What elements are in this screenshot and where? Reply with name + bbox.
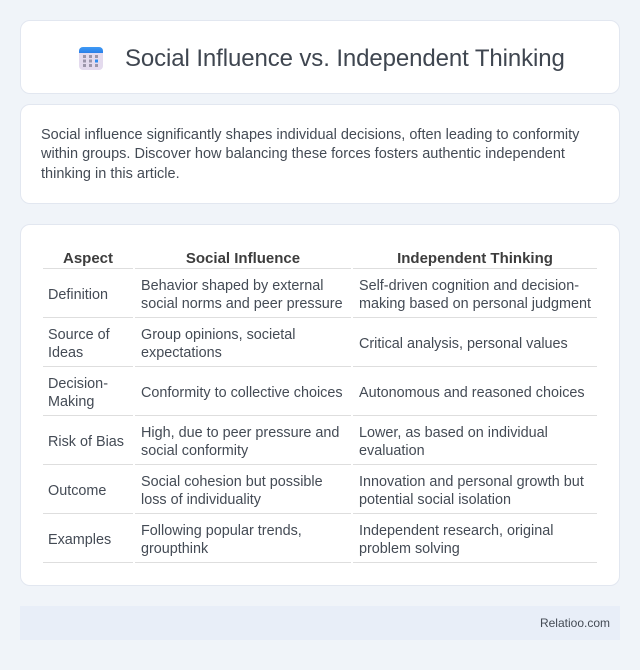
row: definition: Definition bbox=[48, 287, 108, 303]
row: definition: social norms and peer pressure bbox=[141, 296, 343, 312]
row: decision-making bbox=[48, 376, 585, 410]
table heading: independent thinking: Independent Thinking bbox=[397, 250, 553, 267]
row: definition: Behavior shaped by external bbox=[141, 278, 323, 294]
text block: introduction: within groups. Discover how balancing these forces fosters authentic independent bbox=[41, 146, 565, 162]
row: source of ideas: Ideas bbox=[48, 345, 83, 361]
panel: title card bbox=[20, 20, 620, 94]
row: source of ideas: Source of bbox=[48, 327, 110, 343]
row: decision-making: Autonomous and reasoned choices bbox=[359, 385, 585, 401]
footer credit: Relatioo.com bbox=[540, 616, 610, 630]
text block: introduction bbox=[41, 126, 580, 182]
row: source of ideas bbox=[48, 327, 568, 361]
row: outcome: Social cohesion but possible bbox=[141, 474, 323, 490]
row: risk of bias: High, due to peer pressure and bbox=[141, 425, 339, 441]
row: decision-making: Making bbox=[48, 394, 94, 410]
row: risk of bias: social conformity bbox=[141, 443, 248, 459]
row: examples: groupthink bbox=[141, 541, 208, 557]
row: outcome bbox=[48, 474, 584, 508]
row: decision-making: Decision- bbox=[48, 376, 108, 392]
row: examples: problem solving bbox=[359, 541, 460, 557]
text block: introduction: Social influence significantly shapes individual decisions, often leading to conformity bbox=[41, 126, 579, 142]
table heading: aspect: Aspect bbox=[63, 250, 113, 267]
row: outcome: Innovation and personal growth but bbox=[359, 474, 584, 490]
row: decision-making: Conformity to collective choices bbox=[141, 385, 343, 401]
row: risk of bias: Lower, as based on individual bbox=[359, 425, 548, 441]
row: outcome: potential social isolation bbox=[359, 492, 511, 508]
row: outcome: Outcome bbox=[48, 483, 106, 499]
row: risk of bias bbox=[48, 425, 548, 459]
row: source of ideas: Group opinions, societal bbox=[141, 327, 295, 343]
row: examples bbox=[48, 523, 553, 557]
footer bar bbox=[20, 606, 620, 640]
panel: comparison table bbox=[20, 224, 620, 586]
row: source of ideas: expectations bbox=[141, 345, 222, 361]
row: examples: Following popular trends, bbox=[141, 523, 302, 539]
title: Social Influence vs. Independent Thinking bbox=[125, 45, 565, 72]
row: definition: Self-driven cognition and decision- bbox=[359, 278, 579, 294]
row: outcome: loss of individuality bbox=[141, 492, 261, 508]
text block: introduction: thinking in this article. bbox=[41, 166, 180, 182]
row: risk of bias: evaluation bbox=[359, 443, 425, 459]
table heading: social influence: Social Influence bbox=[186, 250, 300, 267]
row: definition: making based on personal judgment bbox=[359, 296, 591, 312]
row: source of ideas: Critical analysis, personal values bbox=[359, 336, 568, 352]
row: definition bbox=[48, 278, 591, 312]
row: risk of bias: Risk of Bias bbox=[48, 434, 124, 450]
icon: calendar bbox=[79, 47, 103, 70]
row: examples: Examples bbox=[48, 532, 111, 548]
panel: introduction bbox=[20, 104, 620, 204]
row: examples: Independent research, original bbox=[359, 523, 553, 539]
